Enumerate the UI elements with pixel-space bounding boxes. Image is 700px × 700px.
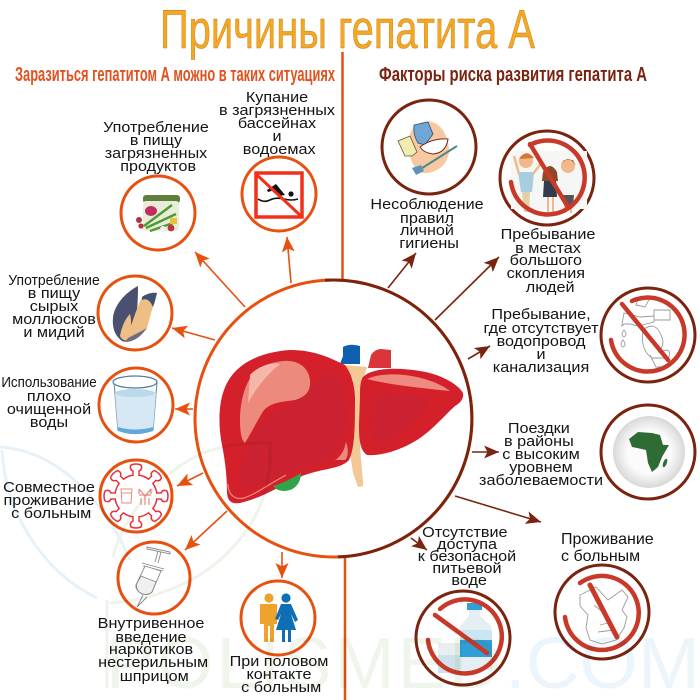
label xyxy=(8,273,100,341)
arrows: left causes xyxy=(172,237,291,578)
label: Проживание xyxy=(561,531,654,548)
panel: unsafe drinking water xyxy=(416,525,516,685)
label: сырых xyxy=(30,299,78,315)
label: очищенной xyxy=(7,402,91,418)
label: шприцом xyxy=(120,669,189,685)
icon: globe with Africa xyxy=(613,416,685,488)
label: нестерильным xyxy=(98,655,208,671)
label: в местах xyxy=(515,241,581,257)
label: канализация xyxy=(493,360,589,376)
label: введение xyxy=(115,630,187,646)
label: контакте xyxy=(247,667,311,683)
icon: mussel xyxy=(113,286,157,342)
icon: man and woman xyxy=(260,593,298,642)
label: гигиены xyxy=(399,236,459,252)
icon: bottle with prohibition xyxy=(428,599,502,673)
label: Пребывание, xyxy=(491,307,591,323)
panel: travel xyxy=(479,405,695,499)
label: большого xyxy=(510,253,582,269)
icon: virus xyxy=(104,464,168,528)
label: и мидий xyxy=(23,325,85,341)
label: моллюсков xyxy=(12,312,96,328)
label: проживание xyxy=(4,493,94,509)
icon: vegetables xyxy=(136,195,180,232)
divider xyxy=(342,52,345,700)
watermark xyxy=(0,443,700,700)
label: с высоким xyxy=(502,447,580,463)
icon: syringe xyxy=(136,547,170,607)
icon: hygiene items xyxy=(398,121,457,175)
label: продуктов xyxy=(120,158,196,175)
liver: highlight xyxy=(240,361,310,443)
label: с больным xyxy=(241,680,321,696)
icon: faucet and toilet with prohibition xyxy=(611,298,685,372)
label: в пищу xyxy=(28,286,80,302)
icon: glass of water xyxy=(113,376,157,434)
panel: sexual contact xyxy=(230,581,328,696)
icon: clasped hands with prohibition xyxy=(565,576,639,650)
label: Употребление xyxy=(8,273,100,289)
panel: living with patient xyxy=(3,460,172,532)
arrows: right risk factors xyxy=(388,253,541,550)
liver: blue vessel xyxy=(340,345,360,364)
label: Несоблюдение xyxy=(370,197,484,213)
label: Поездки xyxy=(508,421,570,437)
panel: raw shellfish xyxy=(8,273,172,350)
icon: no swimming sign xyxy=(256,173,302,217)
label: к безопасной xyxy=(418,549,516,565)
label xyxy=(1,374,97,431)
label: питьевой xyxy=(432,561,502,577)
label: воде xyxy=(451,573,487,589)
label: в пищу xyxy=(130,132,182,149)
label: Внутривенное xyxy=(98,616,204,632)
label: водопровод xyxy=(497,334,585,350)
label: уровнем xyxy=(509,460,573,476)
label: в загрязненных xyxy=(219,103,335,119)
label: скопления xyxy=(507,266,585,282)
label: где отсутствует xyxy=(483,321,599,337)
panel: no plumbing xyxy=(483,288,695,382)
icon: crowd with prohibition xyxy=(511,140,587,214)
label: Употребление xyxy=(103,119,209,136)
label: плохо xyxy=(27,389,71,405)
label: Отсутствие xyxy=(422,525,508,541)
panel: contaminated food xyxy=(103,119,209,250)
panel: swimming xyxy=(219,90,335,231)
label: в районы xyxy=(504,434,574,450)
liver: gallbladder xyxy=(273,473,301,491)
label: с больным xyxy=(11,506,91,522)
label: заболеваемости xyxy=(479,473,603,489)
heading: left column: Заразиться гепатитом А можно в таких ситуациях xyxy=(15,63,335,86)
panel: personal hygiene xyxy=(370,100,484,252)
liver: ligament xyxy=(345,365,367,487)
label: доступа xyxy=(437,537,497,553)
label: Пребывание xyxy=(501,227,595,243)
liver: left lobe xyxy=(359,369,463,455)
label: наркотиков xyxy=(109,642,193,658)
label: людей xyxy=(526,280,575,296)
label: водоемах xyxy=(243,142,316,158)
label: личной xyxy=(400,223,454,239)
label: Купание xyxy=(246,90,308,106)
panel: injection drugs xyxy=(98,542,208,685)
label: бассейнах xyxy=(238,116,316,132)
panel: crowded places xyxy=(500,131,595,296)
label: правил xyxy=(400,211,454,227)
label: и xyxy=(536,347,546,363)
label: Использование xyxy=(1,374,97,391)
label: Совместное xyxy=(3,480,95,496)
label: При половом xyxy=(230,654,328,670)
liver: red vessel xyxy=(368,349,391,368)
central circle with liver xyxy=(195,280,472,557)
label: воды xyxy=(30,415,68,431)
panel: living with infected person xyxy=(555,531,654,659)
label: и xyxy=(272,129,282,145)
label: загрязненных xyxy=(105,145,207,162)
label: с больным xyxy=(561,548,640,565)
liver: right lobe xyxy=(219,350,355,503)
panel: unclean water xyxy=(1,368,173,442)
